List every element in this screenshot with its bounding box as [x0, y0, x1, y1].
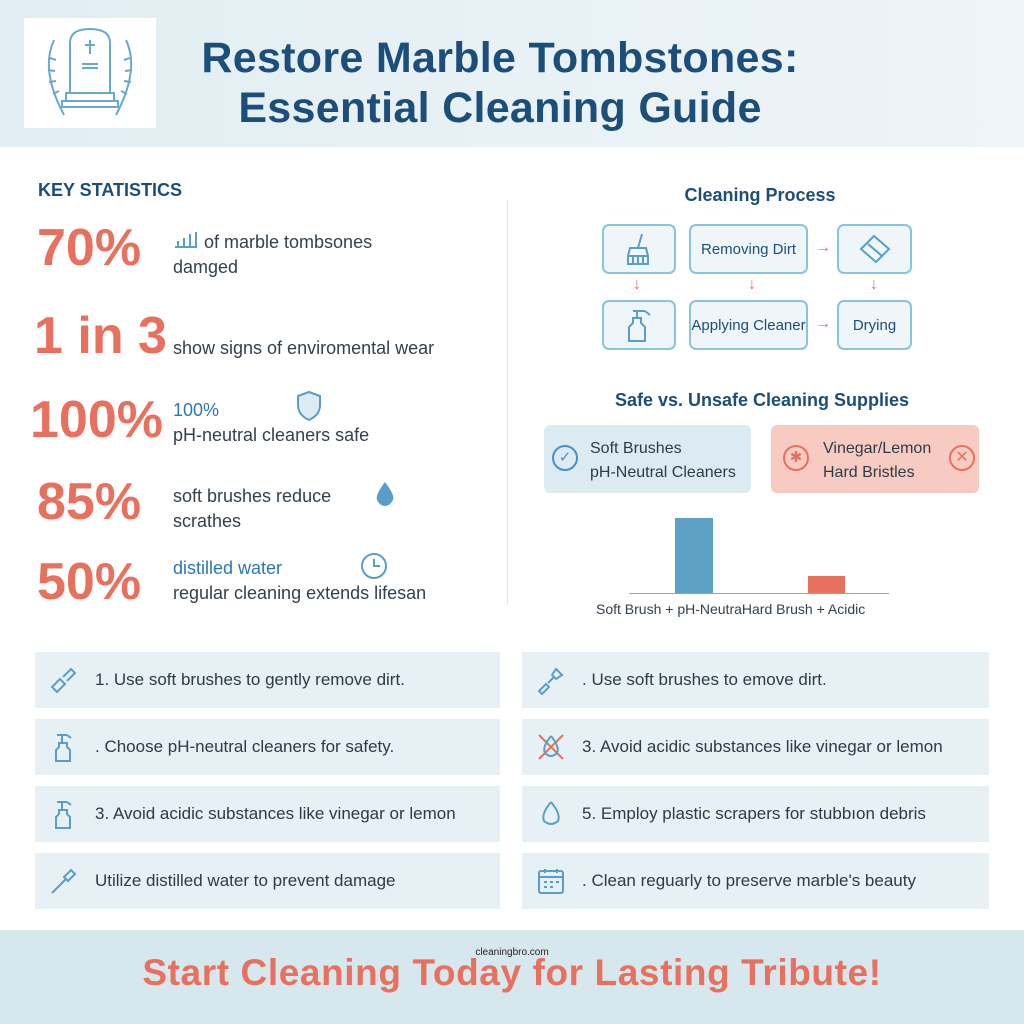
- safe box: pH-Neutral Cleaners: [590, 464, 736, 481]
- tips list: 1. Use soft brushes to gently remove dirt.: [95, 670, 405, 689]
- tips list: [35, 652, 989, 909]
- panel: cleaning process: →: [815, 239, 831, 256]
- unsafe box: Vinegar/Lemon: [823, 440, 931, 457]
- stat 100%: 100%: [30, 391, 163, 449]
- title: Essential Cleaning Guide: [238, 84, 762, 132]
- tips list: 5. Employ plastic scrapers for stubbıon debris: [582, 804, 926, 823]
- tips list: 3. Avoid acidic substances like vinegar or lemon: [95, 804, 456, 823]
- stat 100%: pH-neutral cleaners safe: [173, 425, 369, 445]
- stat 85%: 85%: [37, 473, 141, 531]
- stat 100%: [30, 390, 369, 449]
- tips list: . Use soft brushes to emove dirt.: [582, 670, 827, 689]
- title: [201, 34, 799, 132]
- panel: cleaning process: ↓: [870, 276, 878, 293]
- footer band: cleaningbro.com: [475, 947, 549, 958]
- bar chart: [596, 518, 889, 617]
- panel: cleaning process: →: [815, 315, 831, 332]
- footer band: [0, 930, 1024, 1024]
- panel: cleaning process: Removing Dirt: [701, 240, 796, 258]
- tips list: . Choose pH-neutral cleaners for safety.: [95, 737, 394, 756]
- stat 1 in 3: 1 in 3: [34, 307, 167, 365]
- heading: safe vs unsafe: Safe vs. Unsafe Cleaning Supplies: [615, 390, 909, 410]
- stat 85%: [37, 473, 394, 531]
- stat 50%: distilled water: [173, 558, 282, 578]
- bar chart: Soft Brush + pH-NeutraHard Brush + Acidic: [596, 601, 865, 617]
- unsafe box: ✕: [955, 449, 969, 466]
- stat 70%: [37, 219, 372, 277]
- stat 100%: 100%: [173, 400, 219, 420]
- panel: cleaning process: Cleaning Process: [684, 185, 836, 205]
- panel: cleaning process: Applying Cleaner: [691, 316, 806, 334]
- divider: [507, 200, 508, 605]
- stat 70%: damged: [173, 257, 238, 277]
- tips list: . Clean reguarly to preserve marble's beauty: [582, 871, 916, 890]
- header band: [0, 0, 1024, 147]
- heading: KEY STATISTICS: [38, 180, 182, 200]
- safe box: [544, 425, 751, 493]
- unsafe box: [771, 425, 979, 493]
- stat 50%: 50%: [37, 553, 141, 611]
- stat 70%: 70%: [37, 219, 141, 277]
- panel: cleaning process: ↓: [748, 276, 756, 293]
- panel: cleaning process: ↓: [633, 276, 641, 293]
- logo: tombstone with wreath: [24, 18, 156, 128]
- unsafe box: Hard Bristles: [823, 464, 915, 481]
- panel: key statistics: [30, 180, 434, 611]
- tips list: 3. Avoid acidic substances like vinegar or lemon: [582, 737, 943, 756]
- stat 1 in 3: [34, 307, 434, 365]
- stat 1 in 3: show signs of enviromental wear: [173, 338, 434, 358]
- stat 85%: soft brushes reduce: [173, 486, 331, 506]
- safe box: ✓: [559, 449, 571, 466]
- panel: cleaning process: [602, 185, 912, 350]
- stat 85%: scrathes: [173, 511, 241, 531]
- unsafe box: ✱: [790, 449, 802, 466]
- title: Restore Marble Tombstones:: [201, 34, 799, 82]
- safe box: Soft Brushes: [590, 440, 682, 457]
- panel: cleaning process: Drying: [853, 316, 896, 334]
- stat 70%: of marble tombsones: [204, 232, 372, 252]
- stat 50%: regular cleaning extends lifesan: [173, 583, 426, 603]
- call to action: Start Cleaning Today for Lasting Tribute!: [142, 952, 882, 993]
- tips list: Utilize distilled water to prevent damage: [95, 871, 395, 890]
- stat 50%: [37, 553, 426, 611]
